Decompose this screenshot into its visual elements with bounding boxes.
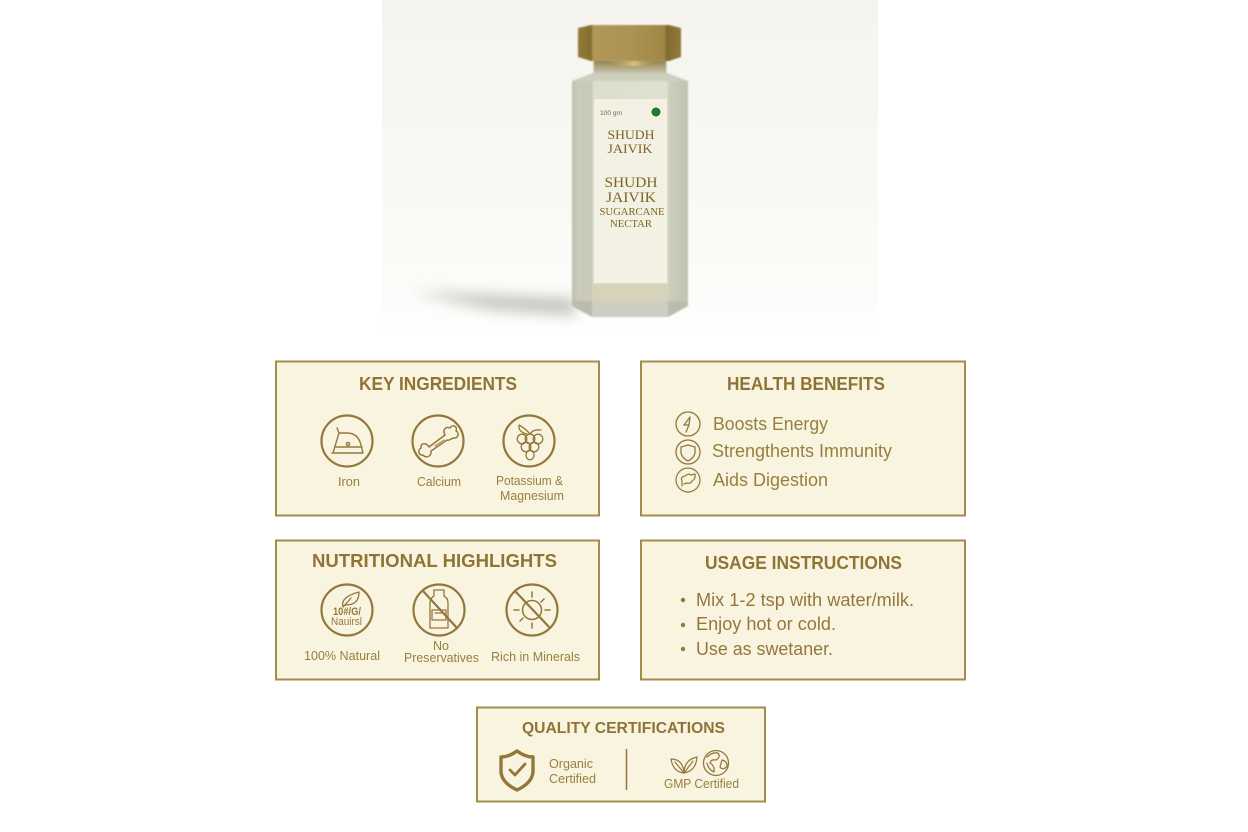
icon: natural badge bbox=[322, 584, 372, 636]
icon: rich in minerals bbox=[506, 584, 558, 636]
heading: health benefits: HEALTH BENEFITS bbox=[727, 374, 885, 394]
icon: energy bbox=[676, 412, 700, 436]
icon: natural badge: Nauirsl bbox=[331, 616, 362, 628]
label: calcium: Calcium bbox=[417, 474, 461, 489]
label: no preservatives: Preservatives bbox=[404, 650, 479, 665]
label: potassium and magnesium: Potassium & bbox=[496, 473, 563, 488]
usage step 3: Use as swetaner. bbox=[696, 639, 833, 659]
bottle shadow bbox=[412, 292, 575, 315]
label: no preservatives bbox=[404, 638, 479, 665]
panel: health benefits bbox=[641, 362, 965, 516]
bottle label: SUGARCANE bbox=[600, 206, 665, 218]
bottle label: NECTAR bbox=[610, 218, 653, 230]
bottle cap bbox=[578, 25, 681, 61]
heading: quality certifications: QUALITY CERTIFICATIONS bbox=[522, 720, 725, 737]
text: boosts energy: Boosts Energy bbox=[713, 414, 828, 434]
bottle label: 100 gm bbox=[600, 110, 622, 117]
label: 100% natural: 100% Natural bbox=[304, 648, 380, 663]
product photo bbox=[382, 0, 878, 330]
icon: natural badge: 10#/G/ bbox=[333, 606, 361, 618]
icon: potassium grapes bbox=[504, 416, 554, 466]
panel: usage instructions bbox=[641, 540, 965, 680]
bottle label: JAIVIK bbox=[608, 141, 653, 156]
heading: usage instructions: USAGE INSTRUCTIONS bbox=[705, 553, 902, 573]
label: organic certified: Organic bbox=[549, 756, 593, 771]
label: gmp certified: GMP Certified bbox=[664, 776, 739, 791]
panel: key ingredients bbox=[276, 362, 599, 516]
bottle bbox=[572, 25, 688, 317]
bottle label bbox=[594, 99, 667, 283]
usage step 2: Enjoy hot or cold. bbox=[696, 614, 836, 634]
label: rich in minerals: Rich in Minerals bbox=[491, 649, 580, 664]
text: strengthents immunity: Strengthents Immunity bbox=[712, 441, 892, 461]
text: aids digestion: Aids Digestion bbox=[713, 470, 828, 490]
bottle label: SHUDH bbox=[608, 127, 654, 142]
panel: quality certifications bbox=[477, 708, 765, 802]
bottle label: SHUDH bbox=[604, 175, 658, 191]
icon: globe bbox=[704, 750, 728, 776]
icon: leaves bbox=[671, 757, 697, 773]
label: iron: Iron bbox=[338, 474, 360, 489]
heading: key ingredients: KEY INGREDIENTS bbox=[359, 374, 517, 394]
label: potassium and magnesium: Magnesium bbox=[500, 488, 564, 503]
bottle label: JAIVIK bbox=[606, 190, 656, 206]
label: organic certified bbox=[549, 756, 596, 786]
bottle neck bbox=[594, 60, 666, 74]
usage step 1: Mix 1-2 tsp with water/milk. bbox=[696, 590, 914, 610]
icon: immunity shield bbox=[676, 440, 700, 464]
icon: organic shield bbox=[501, 751, 533, 790]
icon: digestion bbox=[676, 468, 700, 492]
icon: no preservatives bbox=[414, 584, 464, 636]
icon: calcium bone bbox=[412, 416, 464, 466]
label: organic certified: Certified bbox=[549, 771, 596, 786]
label: no preservatives: No bbox=[433, 638, 449, 653]
label: potassium and magnesium bbox=[496, 473, 564, 503]
heading: nutritional highlights: NUTRITIONAL HIGHLIGHTS bbox=[312, 551, 557, 571]
panel: nutritional highlights bbox=[276, 540, 599, 680]
icon: iron bbox=[322, 416, 372, 466]
